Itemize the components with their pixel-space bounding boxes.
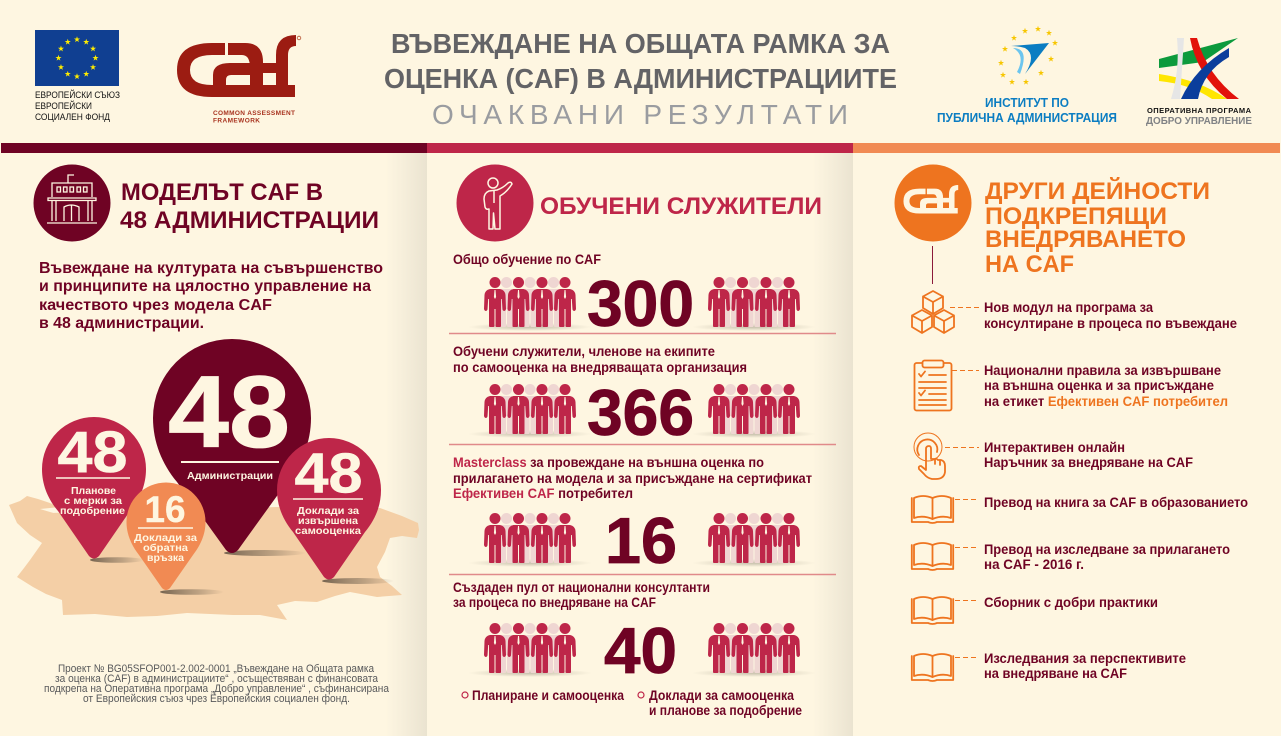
- heading: ОБУЧЕНИ СЛУЖИТЕЛИ: [540, 193, 822, 220]
- logo: Institute of Public Administration: ИНСТИТУТ ПО: [985, 96, 1069, 110]
- row: pool of national consultants 40: [453, 580, 816, 687]
- item: good practices: [912, 595, 1158, 624]
- legend: и планове за подобрение: [649, 703, 802, 718]
- heading: [120, 179, 379, 234]
- pin: 48 plans: с мерки за: [64, 496, 122, 507]
- logo: CAF: COMMON ASSESSMENT: [213, 110, 295, 117]
- row: trained team members 366: [449, 344, 836, 449]
- intro text: [39, 260, 383, 332]
- item: book translation: [912, 495, 1248, 523]
- connector: [932, 246, 934, 284]
- pin: 48 administrations: 48: [168, 355, 290, 469]
- project note: за оценка (CAF) в администрациите“ , осъществяван с финансовата: [55, 673, 379, 685]
- pin: 48 plans: Планове: [71, 486, 116, 497]
- item: book translation: Превод на книга за CAF в образованието: [984, 495, 1248, 510]
- heading: ПОДКРЕПЯЩИ: [985, 203, 1167, 230]
- logo: Operational Programme Good Governance: [1146, 38, 1252, 127]
- icon: person with raised arm: [456, 164, 534, 242]
- row: total CAF training 300: Общо обучение по CAF: [453, 252, 601, 267]
- pin: 48 self-assessment reports: 48: [294, 442, 362, 506]
- column shading left: [385, 153, 427, 736]
- heading: МОДЕЛЪТ CAF В: [121, 179, 323, 206]
- item: interactive handbook: [914, 433, 1193, 479]
- project note: [44, 663, 390, 705]
- project note: подкрепа на Оперативна програма „Добро управление“ , съфинансирана: [44, 683, 390, 695]
- item: national rules: Национални правила за извършване: [984, 363, 1221, 378]
- row: trained team members 366: 366: [587, 376, 694, 449]
- icon: building: [34, 164, 110, 242]
- item: good practices: Сборник с добри практики: [984, 595, 1158, 610]
- title: ОЧАКВАНИ РЕЗУЛТАТИ: [432, 99, 848, 130]
- colour band: [1, 143, 1280, 153]
- pin: 48 administrations: Администрации: [187, 471, 273, 482]
- title: ОЦЕНКА (CAF) В АДМИНИСТРАЦИИТЕ: [384, 63, 897, 94]
- panel: other activities: [894, 164, 1248, 681]
- pin: 16 feedback reports: връзка: [147, 553, 184, 564]
- pin: 48 administrations: [153, 339, 311, 553]
- item: new module: консултиране в процеса по въвеждане: [984, 316, 1237, 331]
- row: pool of national consultants 40: за процеса по внедряване на CAF: [453, 595, 656, 610]
- heading: [985, 177, 1210, 278]
- row: trained team members 366: по самооценка на внедряващата организация: [453, 360, 747, 375]
- pin: 16 feedback reports: обратна: [143, 542, 188, 554]
- icon: CAF badge: [894, 164, 972, 242]
- panel: trained employees: [449, 164, 836, 718]
- heading: ДРУГИ ДЕЙНОСТИ: [985, 177, 1210, 205]
- logo: European Union: ЕВРОПЕЙСКИ СЪЮЗ: [35, 89, 120, 101]
- logo: European Union: ЕВРОПЕЙСКИ: [35, 100, 92, 112]
- item: new module: Нов модул на програма за: [984, 300, 1153, 315]
- row: total CAF training 300: 300: [587, 267, 694, 340]
- project note: от Европейския съюз чрез Европейския социален фонд.: [83, 693, 350, 705]
- intro text: Въвеждане на културата на съвършенство: [39, 260, 383, 277]
- item: national rules: на етикет Ефективен CAF потребител: [984, 394, 1228, 409]
- map of Bulgaria: [9, 496, 419, 620]
- pin: 48 plans: 48: [58, 420, 128, 485]
- item: interactive handbook: Наръчник за внедряване на CAF: [984, 455, 1193, 470]
- item: study translation: на CAF - 2016 г.: [984, 557, 1084, 572]
- row: masterclass 16: Masterclass за провеждане на външна оценка по: [453, 455, 764, 470]
- intro text: в 48 администрации.: [39, 315, 204, 332]
- legend: [462, 688, 802, 718]
- column shading middle: [812, 153, 853, 736]
- pin: 16 feedback reports: 16: [144, 489, 186, 530]
- row: masterclass 16: Ефективен CAF потребител: [453, 486, 633, 501]
- legend: Доклади за самооценка: [649, 688, 794, 703]
- intro text: качеството чрез модела CAF: [39, 297, 272, 314]
- item: perspective studies: Изследвания за перспективите: [984, 651, 1186, 666]
- row: masterclass 16: прилагането на модела и за присъждане на сертификат: [453, 471, 812, 486]
- project note: Проект № BG05SFOP001-2.002-0001 „Въвеждане на Общата рамка: [58, 663, 375, 675]
- item: study translation: Превод на изследване за прилагането: [984, 542, 1230, 557]
- item: new module: [912, 291, 1237, 333]
- pin: 16 feedback reports: Доклади за: [134, 533, 197, 544]
- row: pool of national consultants 40: 40: [604, 614, 677, 687]
- item: national rules: [914, 360, 1228, 410]
- row: masterclass 16: 16: [605, 504, 677, 577]
- panel: CAF model in 48 administrations: [9, 164, 419, 705]
- pin: 48 self-assessment reports: извършена: [298, 516, 358, 527]
- item: perspective studies: [912, 651, 1186, 681]
- logo: European Union: [35, 30, 120, 123]
- item: study translation: [912, 542, 1230, 572]
- title: ВЪВЕЖДАНЕ НА ОБЩАТА РАМКА ЗА: [391, 28, 890, 59]
- heading: НА CAF: [985, 251, 1074, 278]
- logo: CAF: FRAMEWORK: [213, 118, 260, 124]
- row: trained team members 366: Обучени служители, членове на екипите: [453, 344, 715, 359]
- heading: ВНЕДРЯВАНЕТО: [985, 226, 1186, 253]
- item: interactive handbook: Интерактивен онлайн: [984, 440, 1125, 455]
- row: masterclass 16: [449, 455, 836, 577]
- legend: Планиране и самооценка: [472, 688, 624, 703]
- item: national rules: на външна оценка и за присъждане: [984, 378, 1214, 393]
- logo: European Union: СОЦИАЛЕН ФОНД: [35, 112, 111, 123]
- logo: Operational Programme Good Governance: ОПЕРАТИВНА ПРОГРАМА: [1147, 106, 1252, 115]
- pin: 16 feedback reports: [126, 482, 206, 590]
- title: [384, 28, 897, 130]
- pin shadows: [90, 550, 394, 595]
- pin: 48 plans: подобрение: [60, 505, 125, 517]
- row: pool of national consultants 40: Създаден пул от национални консултанти: [453, 580, 710, 595]
- pin: 48 self-assessment reports: самооценка: [295, 526, 361, 537]
- logo: Institute of Public Administration: [937, 26, 1117, 125]
- heading: 48 АДМИНИСТРАЦИИ: [120, 207, 379, 234]
- logo: Operational Programme Good Governance: ДОБРО УПРАВЛЕНИЕ: [1146, 115, 1252, 127]
- row: total CAF training 300: [449, 252, 836, 340]
- pin: 48 self-assessment reports: [277, 438, 381, 580]
- logo: CAF: [177, 35, 301, 124]
- pin: 48 self-assessment reports: Доклади за: [297, 506, 359, 517]
- item: perspective studies: на внедряване на CAF: [984, 666, 1127, 681]
- intro text: и принципите на цялостно управление на: [39, 278, 371, 295]
- pin: 48 plans: [42, 417, 146, 558]
- logo: Institute of Public Administration: ПУБЛИЧНА АДМИНИСТРАЦИЯ: [937, 111, 1117, 125]
